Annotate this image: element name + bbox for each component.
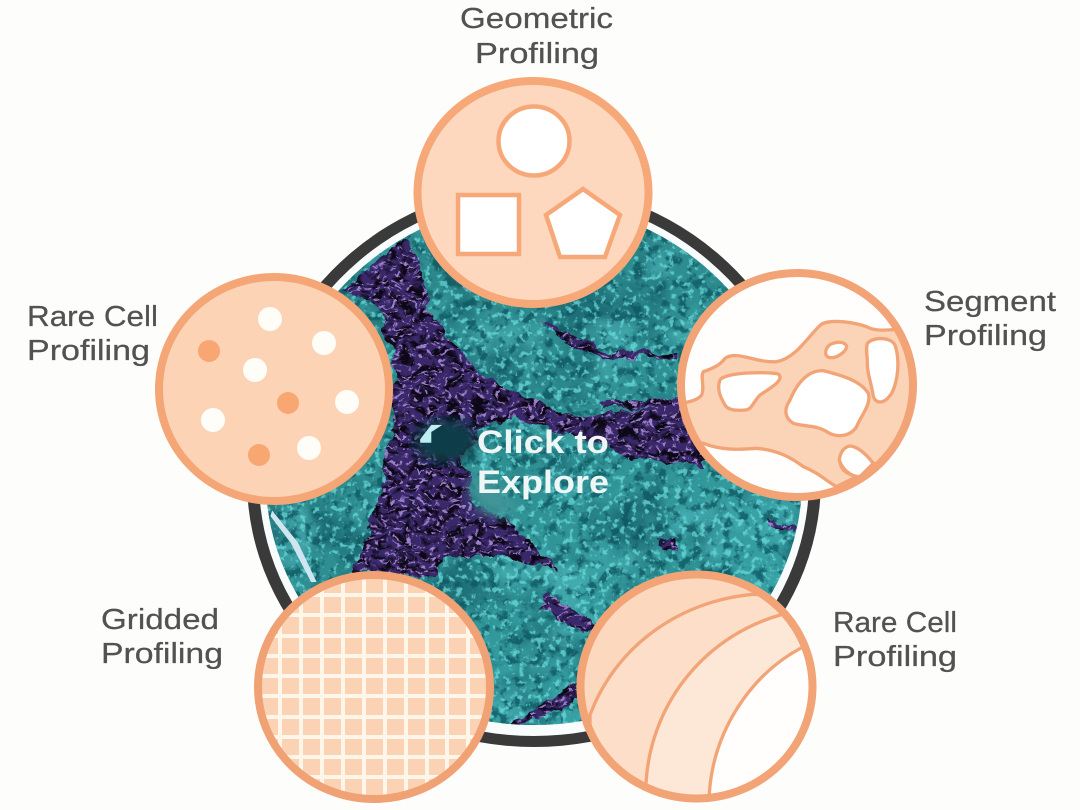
tissue image <box>267 228 801 725</box>
tissue segment blob <box>686 320 909 487</box>
label: Geometric Profiling: Geometric <box>460 3 613 35</box>
label: Rare Cell Profiling (right) <box>833 607 957 673</box>
label: Gridded Profiling <box>101 604 223 670</box>
nested arc bands <box>588 592 778 782</box>
label: Rare Cell Profiling (left) <box>27 301 158 367</box>
white inner ring <box>259 196 809 736</box>
label: Rare Cell Profiling (left): Profiling <box>27 335 150 367</box>
label: Rare Cell Profiling (right): Rare Cell <box>833 607 957 639</box>
label: Segment Profiling: Segment <box>924 286 1056 318</box>
white and orange cell dots <box>198 307 359 466</box>
dark outer ring <box>247 185 821 747</box>
label: Rare Cell Profiling (right): Profiling <box>833 641 957 673</box>
label: Geometric Profiling <box>460 3 613 70</box>
center label: Click to Explore: Explore <box>477 464 609 500</box>
shape: square <box>458 195 519 254</box>
shape: pentagon <box>546 189 620 257</box>
center label: Click to Explore <box>477 424 609 500</box>
label: Gridded Profiling: Profiling <box>101 638 223 670</box>
label: Segment Profiling <box>924 286 1056 352</box>
node: Gridded Profiling icon <box>255 570 495 805</box>
label: Rare Cell Profiling (left): Rare Cell <box>27 301 158 333</box>
node: Geometric Profiling icon <box>418 81 648 304</box>
node: Rare Cell Profiling icon <box>159 277 389 501</box>
segment holes <box>719 373 780 410</box>
label: Gridded Profiling: Gridded <box>101 604 219 636</box>
label: Segment Profiling: Profiling <box>924 320 1047 352</box>
center label: Click to Explore: Click to <box>477 424 609 460</box>
node: Rare Cell Profiling arcs icon <box>580 574 837 805</box>
shape: circle <box>498 106 570 176</box>
grid lines <box>262 579 486 795</box>
node: Segment Profiling icon <box>670 273 930 497</box>
label: Geometric Profiling: Profiling <box>475 38 599 70</box>
